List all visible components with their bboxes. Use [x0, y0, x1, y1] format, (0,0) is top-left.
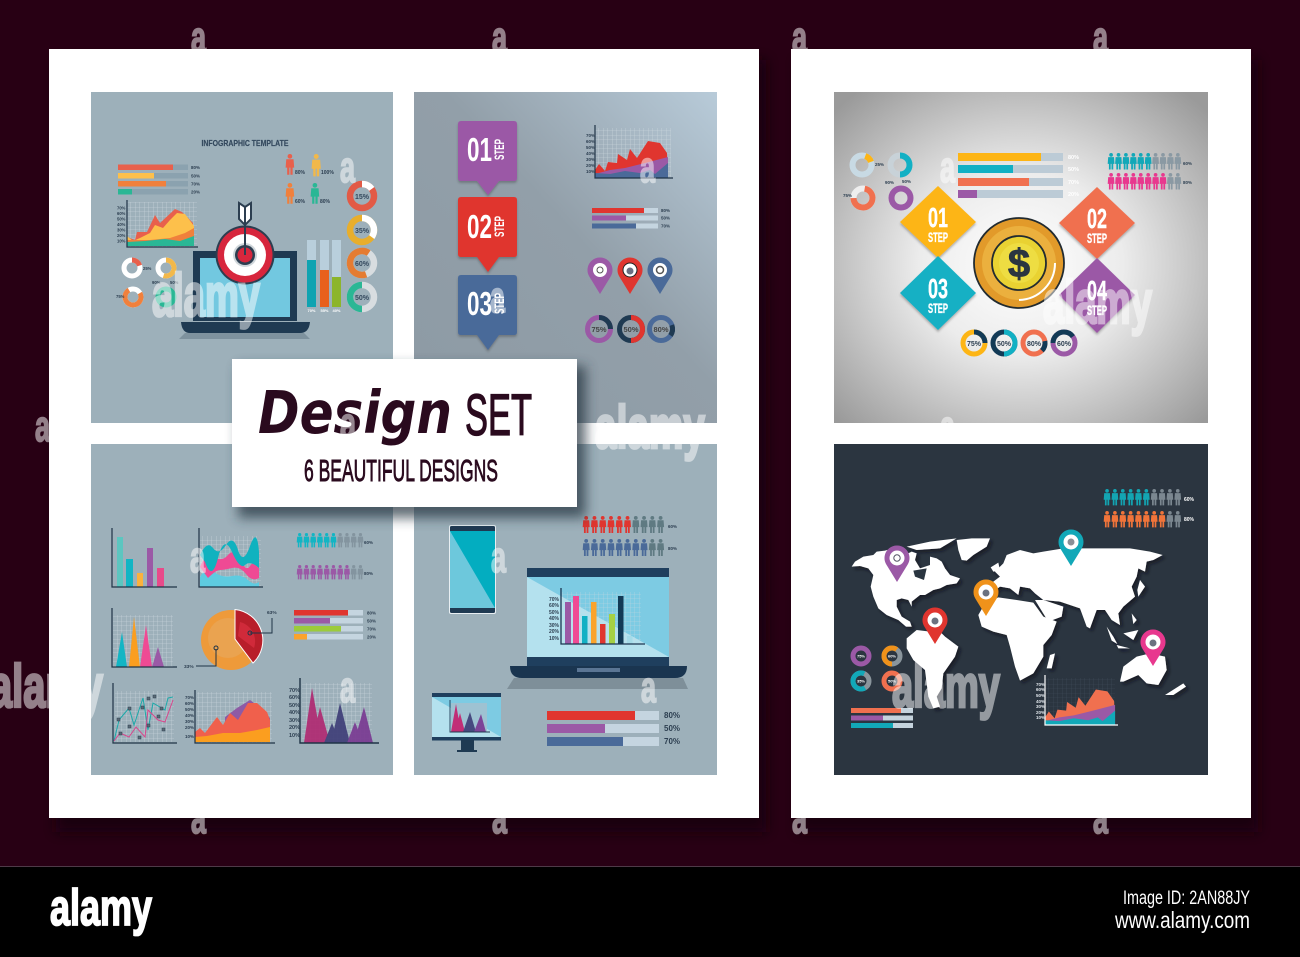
footer logo: alamy [50, 879, 152, 936]
step diamond 03: STEP [928, 300, 948, 316]
ring charts: 15% [355, 194, 370, 201]
small donut charts: 90% [152, 280, 161, 285]
watermark overlay [0, 13, 1152, 843]
laptop with bar chart [507, 568, 688, 689]
map pins [884, 530, 1166, 666]
watermark overlay: alamy [892, 653, 1000, 720]
monitor with peaks chart [432, 693, 501, 752]
watermark overlay: a [191, 794, 206, 843]
people rows: 80% [1183, 180, 1192, 185]
area chart: 10% [1036, 715, 1045, 720]
people rows [583, 516, 677, 556]
panel: infographic template [91, 92, 393, 423]
progress bars: 70% [191, 182, 200, 186]
laptop with bar chart: 30% [549, 623, 560, 629]
laptop with bar chart: 50% [549, 610, 560, 616]
people statistics [286, 154, 334, 205]
watermark overlay: a [492, 13, 507, 62]
peaks chart: 70% [289, 688, 300, 694]
watermark overlay: a [491, 533, 506, 582]
watermark overlay: a [641, 663, 656, 712]
panel: world map [834, 444, 1208, 775]
ring charts [963, 330, 1075, 356]
donut charts [843, 153, 911, 209]
watermark overlay: a [191, 13, 206, 62]
progress bars: 80% [191, 165, 200, 170]
donut charts: 90% [885, 180, 894, 185]
orange area chart: 60% [185, 701, 194, 706]
laptop with bar chart: 20% [549, 629, 560, 635]
triangle chart [112, 608, 177, 667]
card shadows [56, 60, 1258, 832]
area chart: 70% [117, 206, 126, 210]
watermark overlay: a [190, 533, 205, 582]
watermark overlay: a [1093, 13, 1108, 62]
step diamond 02: 02 [1087, 203, 1107, 234]
ring charts: 60% [355, 261, 370, 268]
footer bar [0, 866, 1300, 957]
progress bars: 80% [661, 208, 670, 213]
progress bars: 20% [1068, 192, 1079, 198]
progress bars [958, 153, 1079, 198]
step diamond 01: STEP [928, 229, 948, 245]
people rows: 60% [668, 524, 677, 529]
step diamond 04 [1059, 258, 1135, 333]
progress bars: 80% [1068, 155, 1079, 161]
ring charts [588, 314, 676, 344]
tube bar chart: 40% [332, 308, 341, 313]
laptop with bar chart: 40% [549, 616, 560, 622]
step 03 callout: STEP [491, 293, 507, 314]
peaks chart: 10% [289, 733, 300, 739]
donut charts: 50% [902, 179, 911, 184]
website: www.alamy.com [1114, 907, 1250, 933]
title card [232, 359, 577, 507]
step 02 callout: 02 [467, 208, 492, 245]
panel: four steps with coin [834, 92, 1208, 423]
people rows: 80% [364, 571, 373, 576]
progress bars: 20% [191, 190, 200, 194]
peaks chart: 30% [289, 718, 300, 724]
small ring charts: 50% [888, 678, 896, 684]
orange area chart: 20% [185, 725, 194, 730]
orange area chart: 70% [185, 695, 194, 700]
progress bars [547, 711, 680, 746]
watermark overlay: a [35, 402, 50, 451]
step diamond 04: STEP [1087, 302, 1107, 318]
subtitle: 6 BEAUTIFUL DESIGNS [304, 453, 498, 488]
watermark overlay: a [1093, 794, 1108, 843]
small ring charts [850, 648, 900, 692]
pie chart [184, 610, 277, 670]
progress bars [294, 610, 376, 640]
small ring charts: 35% [857, 678, 865, 684]
area chart: 50% [586, 145, 595, 150]
area chart: 30% [1036, 704, 1045, 709]
peaks chart: 60% [289, 695, 300, 701]
area chart: 20% [586, 163, 595, 168]
people rows [1108, 153, 1192, 189]
area chart: 10% [586, 169, 595, 174]
card: right white sheet with two designs [791, 49, 1251, 818]
progress bars: 70% [661, 224, 670, 228]
area chart: 30% [586, 157, 595, 162]
people rows: 60% [1183, 161, 1192, 166]
watermark overlay: a [340, 663, 355, 712]
tube bar chart: 55% [320, 308, 329, 313]
ring charts: 80% [653, 325, 669, 334]
watermark overlay: a [492, 794, 507, 843]
people rows: 80% [1184, 517, 1195, 523]
donut charts: 25% [875, 162, 884, 167]
watermark overlay: a [792, 794, 807, 843]
area chart: 40% [1036, 699, 1045, 704]
area chart: 20% [1036, 710, 1045, 715]
title card shadow [238, 366, 586, 518]
heading: infographic template: INFOGRAPHIC TEMPLATE [202, 138, 289, 148]
progress bars: 50% [1068, 167, 1079, 173]
image id: Image ID: 2AN88JY [1123, 888, 1250, 909]
orange area chart: 10% [185, 734, 194, 739]
watermark overlay: a [640, 143, 655, 192]
orange area chart [185, 690, 275, 743]
step diamond 04: 04 [1087, 275, 1107, 306]
pie chart: 33% [184, 664, 194, 670]
step diamond 01 [900, 186, 976, 258]
step 01 callout: STEP [491, 139, 507, 160]
ring charts: 50% [623, 325, 639, 334]
step 03 callout [458, 275, 517, 350]
ring charts [347, 184, 377, 309]
ring charts: 75% [967, 341, 982, 348]
step 01 callout [458, 121, 517, 195]
ring charts: 35% [355, 228, 370, 235]
small donut charts: 75% [116, 294, 125, 299]
laptop with bar chart: 70% [549, 597, 560, 603]
area chart: 60% [586, 139, 595, 144]
bar chart [112, 528, 177, 587]
progress bars: 70% [1068, 180, 1079, 186]
wave area chart [199, 528, 263, 587]
people rows [1104, 489, 1195, 527]
ring charts: 60% [1057, 341, 1072, 348]
area chart: 60% [117, 211, 126, 216]
peaks chart: 40% [289, 710, 300, 716]
ring charts: 50% [355, 295, 370, 302]
location pins [588, 258, 672, 294]
small donut charts: 25% [143, 266, 152, 271]
peaks chart [289, 678, 379, 743]
title: Design: Design [258, 378, 452, 447]
orange area chart: 40% [185, 713, 194, 718]
tube bar chart [307, 240, 341, 313]
step diamond 01: 01 [928, 202, 948, 233]
area chart [117, 200, 198, 247]
area chart: 40% [586, 151, 595, 156]
watermark overlay: alamy [152, 262, 260, 329]
area chart: 30% [117, 228, 126, 232]
panel: charts collection [91, 444, 393, 775]
orange area chart: 50% [185, 707, 194, 712]
icon: dollar coin [974, 218, 1064, 308]
watermark overlay: a [340, 143, 355, 192]
people statistics: 80% [295, 170, 306, 176]
small ring charts: 60% [888, 654, 896, 658]
progress bars [851, 708, 913, 728]
laptop with bar chart: 60% [549, 603, 560, 609]
step 02 callout [458, 197, 517, 272]
tube bar chart: 70% [307, 308, 316, 313]
step diamond 02: STEP [1087, 230, 1107, 246]
laptop with bar chart: 10% [549, 636, 560, 642]
watermark overlay: a [940, 143, 955, 192]
step 03 callout: 03 [467, 285, 492, 322]
progress bars: 50% [664, 724, 680, 733]
watermark overlay: alamy [595, 394, 705, 461]
line chart [113, 683, 177, 743]
progress bars [118, 164, 200, 194]
icon: target with arrow [216, 203, 274, 284]
people rows [297, 533, 373, 579]
area chart [1036, 675, 1118, 725]
progress bars: 50% [191, 174, 200, 178]
panel: devices [414, 444, 717, 775]
progress bars: 80% [367, 610, 376, 616]
people rows: 60% [364, 540, 373, 545]
pie chart: 63% [267, 610, 277, 616]
people statistics: 100% [321, 170, 334, 176]
progress bars: 70% [367, 626, 376, 632]
title: Set: SET [465, 383, 532, 448]
small donut charts [116, 260, 179, 308]
icon: dollar coin: $ [1008, 242, 1030, 286]
watermark overlay: a [792, 13, 807, 62]
area chart: 50% [117, 216, 126, 222]
step diamond 03: 03 [928, 273, 948, 304]
area chart: 70% [586, 133, 595, 138]
area chart: 60% [1036, 687, 1045, 692]
peaks chart: 20% [289, 725, 300, 731]
progress bars: 50% [661, 216, 670, 220]
small ring charts: 75% [857, 654, 865, 658]
step 02 callout: STEP [491, 216, 507, 237]
area chart [586, 125, 673, 178]
step diamond 02 [1059, 187, 1135, 259]
area chart: 40% [117, 222, 126, 227]
peaks chart: 50% [289, 703, 300, 709]
watermark overlay: a [940, 402, 955, 451]
step 01 callout: 01 [467, 131, 492, 168]
progress bars [592, 208, 670, 228]
ring charts: 80% [1027, 341, 1042, 348]
step diamond 03 [900, 256, 976, 330]
world map [852, 538, 1186, 708]
area chart: 10% [117, 238, 126, 244]
donut charts: 75% [843, 193, 852, 198]
area chart: 20% [117, 233, 126, 238]
watermark overlay: a [340, 399, 356, 448]
area chart: 50% [1036, 693, 1045, 698]
watermark overlay: alamy [1043, 269, 1152, 336]
progress bars: 70% [664, 737, 680, 746]
people statistics: 60% [295, 199, 306, 205]
progress bars: 80% [664, 711, 680, 720]
ring charts: 75% [591, 325, 607, 334]
laptop [179, 251, 310, 339]
panel: steps [414, 92, 717, 423]
ring charts: 50% [997, 341, 1012, 348]
watermark overlay: a [490, 273, 505, 322]
icon: smartphone [449, 525, 496, 614]
people rows: 60% [1184, 497, 1195, 503]
small donut charts: 50% [170, 280, 179, 285]
card: left white sheet with four designs [49, 49, 759, 818]
progress bars: 20% [367, 634, 376, 640]
orange area chart: 30% [185, 719, 194, 724]
people rows: 80% [668, 546, 677, 551]
area chart: 70% [1036, 682, 1045, 687]
people statistics: 80% [320, 199, 331, 205]
progress bars: 50% [367, 618, 376, 624]
